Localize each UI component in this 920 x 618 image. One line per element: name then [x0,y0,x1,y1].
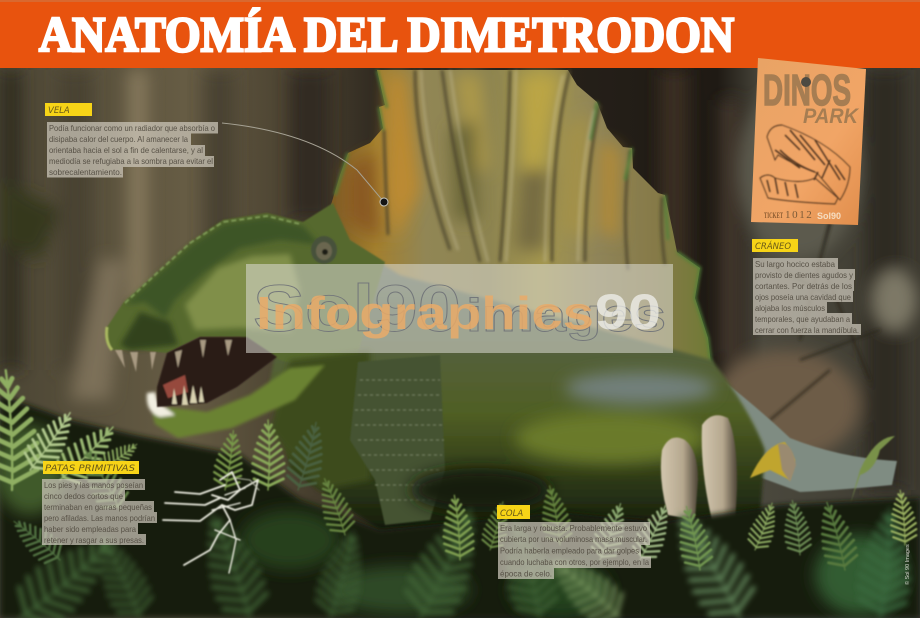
ticket: Dinos Park: DINOS [763,66,851,115]
text block: cola: Podría haberla empleado para dar golpes [500,546,639,556]
text block: craneo: alojaba los músculos [755,303,825,313]
watermark [246,264,673,353]
annotation: craneo [752,239,861,335]
leader line to sail [222,123,388,206]
label: VELA: VELA [48,106,70,116]
text block: patas: Los pies y las manos poseían [44,480,143,490]
lower jaw [147,365,325,438]
watermark: 90 [595,284,661,340]
rocks and plants at the tail [661,415,895,525]
olive belly shading [410,372,715,512]
ticket: Dinos Park: 1012 [785,209,813,221]
ticket: Dinos Park [751,58,866,225]
title: ANATOMÍA DEL DIMETRODON [39,6,734,62]
text block: vela: orientaba hacia el sol a fin de calentarse, y al [49,145,203,155]
label: COLA: COLA [500,509,523,519]
shoulder and front leg [350,355,445,525]
text block: patas: cinco dedos cortos que [44,491,123,501]
neck under jaw [270,350,370,490]
label: COLA [497,505,530,519]
ticket: Dinos Park: TICKET [764,211,783,220]
text block: vela: Podía funcionar como un radiador que absorbía o [49,123,215,133]
icon: claw skeleton sketch [163,472,259,573]
text block: patas: pero afiladas. Las manos podrían [44,513,155,523]
annotation: vela [45,103,388,206]
annotation: patas primitivas [42,461,259,573]
text block: cola [498,522,651,579]
text block: cola: Era larga y robusta. Probablemente estuvo [500,523,647,533]
text block: craneo: provisto de dientes agudos y [755,270,854,280]
ticket: Dinos Park: PARK [803,105,860,128]
text block: vela: disipaba calor del cuerpo. Al amanecer la [49,134,188,144]
watermark: images [466,289,666,341]
text block: patas [42,479,157,545]
text block: vela [47,122,218,178]
text block: vela: sobrecalentamiento. [49,167,122,177]
eye [311,236,337,264]
text block: craneo [753,258,861,335]
text block: cola: época de celo. [500,568,552,578]
text block: craneo: temporales, que ayudaban a [755,314,850,324]
text block: craneo: cortantes. Por detrás de los [755,281,852,291]
text block: craneo: cerrar con fuerza la mandíbula. [755,325,859,335]
ticket: Dinos Park: Sol90 [817,211,841,221]
text block: vela: mediodía se refugiaba a la sombra para evitar el [49,156,213,166]
sail [330,70,712,390]
text block: cola: cubierta por una voluminosa masa muscular. [500,534,647,544]
text block: patas: haber sido empleadas para [44,524,136,534]
watermark: Infographics [256,287,594,339]
head and neck [106,203,385,380]
text block: patas: terminaban en garras pequeñas [44,502,152,512]
body [270,225,765,530]
icon: skull sketch [760,125,850,204]
annotation: cola [497,505,651,579]
label: VELA [45,103,92,116]
text block: cola: cuando luchaba con otros, por ejemplo, en la [500,557,649,567]
text block: patas: retener y rasgar a sus presas. [44,535,144,545]
text block: craneo: ojos poseía una cavidad que [755,292,851,302]
label: PATAS PRIMITIVAS [43,461,139,474]
foreground ferns [0,369,920,618]
dimetrodon illustration [106,70,897,530]
text block: craneo: Su largo hocico estaba [755,259,835,269]
credit: © Sol 90 Images [904,544,911,585]
watermark: Sol90 [253,271,461,345]
header bar [0,0,920,68]
tail [690,372,897,492]
label: CRÁNEO: CRÁNEO [755,240,791,252]
open mouth with teeth [115,337,277,407]
label: PATAS PRIMITIVAS: PATAS PRIMITIVAS [45,464,136,474]
